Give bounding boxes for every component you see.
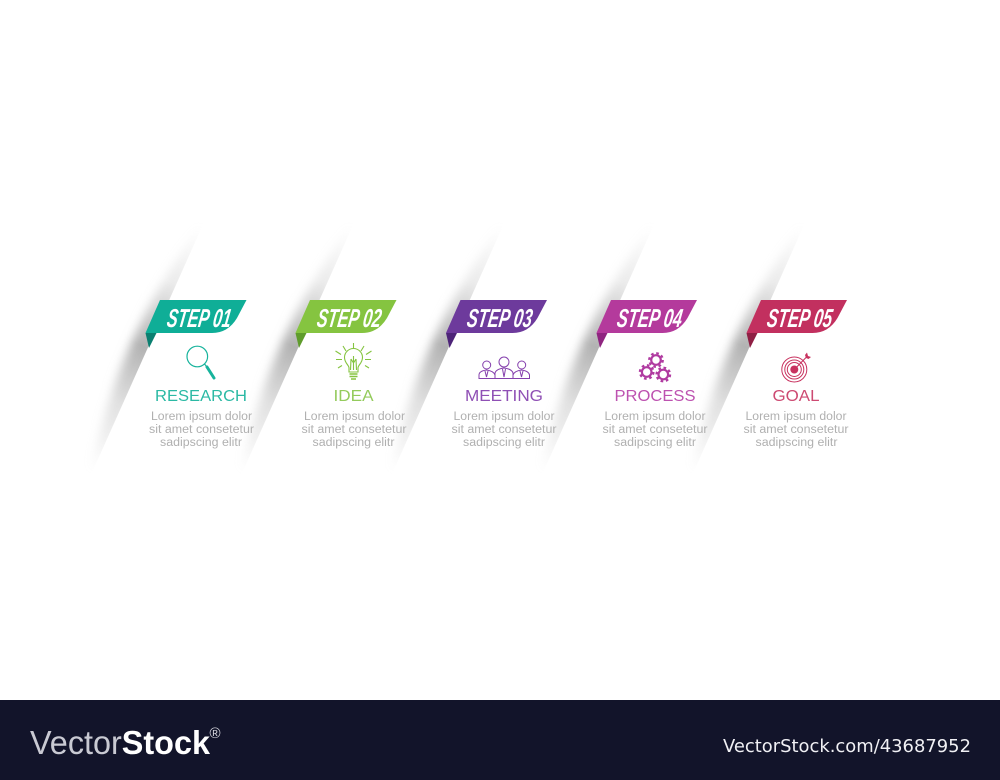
icon: target with arrow — [782, 352, 811, 382]
panel: step 2 idea — [296, 300, 407, 449]
text: idea body: sadipscing elitr — [312, 437, 395, 449]
logo: VectorStock: VectorStock — [30, 724, 211, 761]
text: process body — [602, 411, 708, 449]
diagonal shadow 5 — [700, 252, 791, 450]
panel: step 1 research — [146, 300, 254, 449]
label: process: PROCESS — [614, 388, 696, 405]
banner: step 03 — [446, 300, 547, 348]
text: goal body: Lorem ipsum dolor — [746, 411, 847, 423]
text: process body: sit amet consetetur — [602, 424, 708, 436]
text: research body — [149, 411, 254, 449]
text: goal body: sadipscing elitr — [756, 437, 838, 449]
footer bar — [0, 700, 1000, 780]
text: goal body — [744, 411, 849, 449]
icon: light bulb — [336, 343, 372, 379]
banner: step 05 — [746, 300, 847, 348]
text: meeting body: sit amet consetetur — [452, 424, 557, 436]
panel: step 3 meeting — [446, 300, 557, 449]
label: meeting: MEETING — [465, 388, 543, 405]
text: meeting body: Lorem ipsum dolor — [454, 411, 555, 423]
icon: three people — [479, 357, 530, 378]
banner: step 01: STEP 01 — [165, 303, 234, 333]
icon: magnifying glass — [187, 346, 214, 378]
label: goal: GOAL — [772, 388, 820, 405]
text: research body: Lorem ipsum dolor — [151, 411, 252, 423]
panel: step 5 goal — [744, 300, 849, 449]
diagonal shadow 1 — [98, 252, 190, 449]
text: idea body: sit amet consetetur — [302, 424, 407, 436]
text: meeting body: sadipscing elitr — [463, 437, 545, 449]
text: process body: Lorem ipsum dolor — [604, 411, 706, 423]
banner: step 01 — [146, 300, 246, 348]
text: research body: sadipscing elitr — [160, 437, 242, 449]
text: research body: sit amet consetetur — [149, 424, 254, 436]
banner: step 02 — [296, 300, 396, 348]
label: idea: IDEA — [334, 388, 374, 405]
image id: VectorStock.com/43687952 — [723, 736, 971, 757]
text: goal body: sit amet consetetur — [744, 424, 849, 436]
logo: registered mark: ® — [210, 725, 221, 742]
banner: step 04 — [596, 300, 697, 348]
panel: step 4 process — [596, 300, 708, 449]
label: research: RESEARCH — [155, 388, 247, 405]
banner: step 05: STEP 05 — [765, 303, 835, 333]
text: idea body: Lorem ipsum dolor — [304, 411, 405, 423]
diagonal shadow 2 — [249, 252, 340, 450]
text: idea body — [302, 411, 407, 449]
icon: gears — [640, 353, 670, 381]
banner: step 02: STEP 02 — [315, 303, 384, 333]
diagonal shadow 3 — [400, 252, 490, 450]
banner: step 04: STEP 04 — [615, 303, 685, 333]
text: process body: sadipscing elitr — [614, 437, 696, 449]
banner: step 03: STEP 03 — [465, 303, 535, 333]
text: meeting body — [452, 411, 557, 449]
diagonal shadow 4 — [550, 252, 641, 449]
